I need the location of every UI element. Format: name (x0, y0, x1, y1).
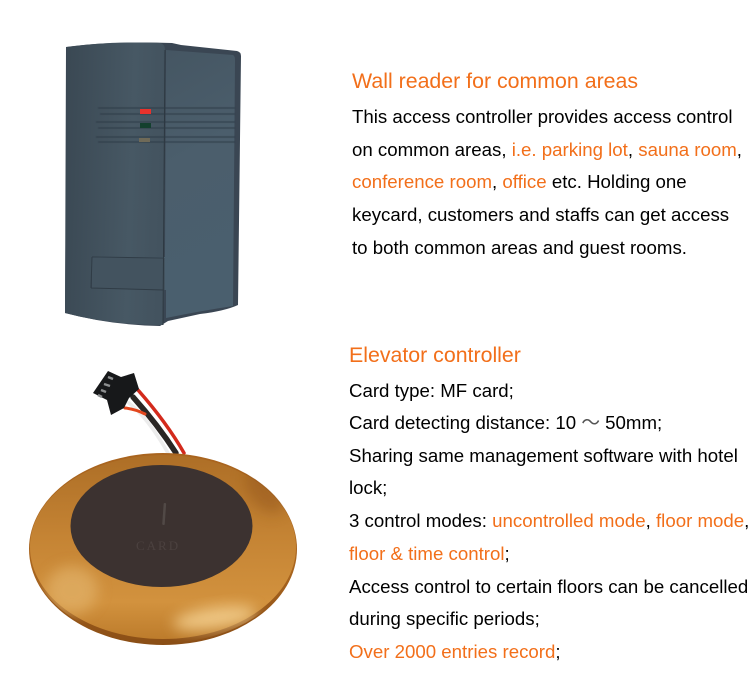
body: elevator controller: Card type: MF card; (349, 380, 514, 401)
body: elevator controller: Card detecting distance: 10 ～ 50mm; (349, 412, 662, 433)
product image: wall reader (65, 42, 241, 326)
cable bundle (125, 390, 184, 453)
card pad (70, 465, 252, 587)
body: elevator controller: floor & time control; (349, 543, 510, 564)
text block: elevator controller (349, 343, 749, 662)
body: elevator controller: during specific periods; (349, 608, 540, 629)
body: wall reader: This access controller provides access control (352, 106, 733, 127)
heading: wall reader: Wall reader for common areas (352, 69, 638, 93)
body: elevator controller: Sharing same management software with hotel (349, 445, 738, 466)
product image: elevator controller puck (29, 371, 297, 645)
connector (93, 371, 139, 415)
body: wall reader: conference room, office etc. Holding one (352, 171, 687, 192)
pad label: CARD (136, 538, 180, 553)
heading: elevator controller: Elevator controller (349, 343, 521, 367)
puck body (29, 453, 297, 645)
body: elevator controller: Access control to certain floors can be cancelled (349, 576, 748, 597)
body: wall reader: to both common areas and guest rooms. (352, 237, 687, 258)
body: elevator controller: Over 2000 entries record; (349, 641, 561, 662)
body: elevator controller: lock; (349, 477, 387, 498)
body: elevator controller: 3 control modes: uncontrolled mode, floor mode, (349, 510, 749, 531)
body: wall reader: on common areas, i.e. parking lot, sauna room, (352, 139, 742, 160)
body: elevator controller (349, 380, 749, 662)
text block: wall reader (352, 69, 742, 258)
body: wall reader: keycard, customers and staffs can get access (352, 204, 729, 225)
body: wall reader (352, 106, 742, 258)
